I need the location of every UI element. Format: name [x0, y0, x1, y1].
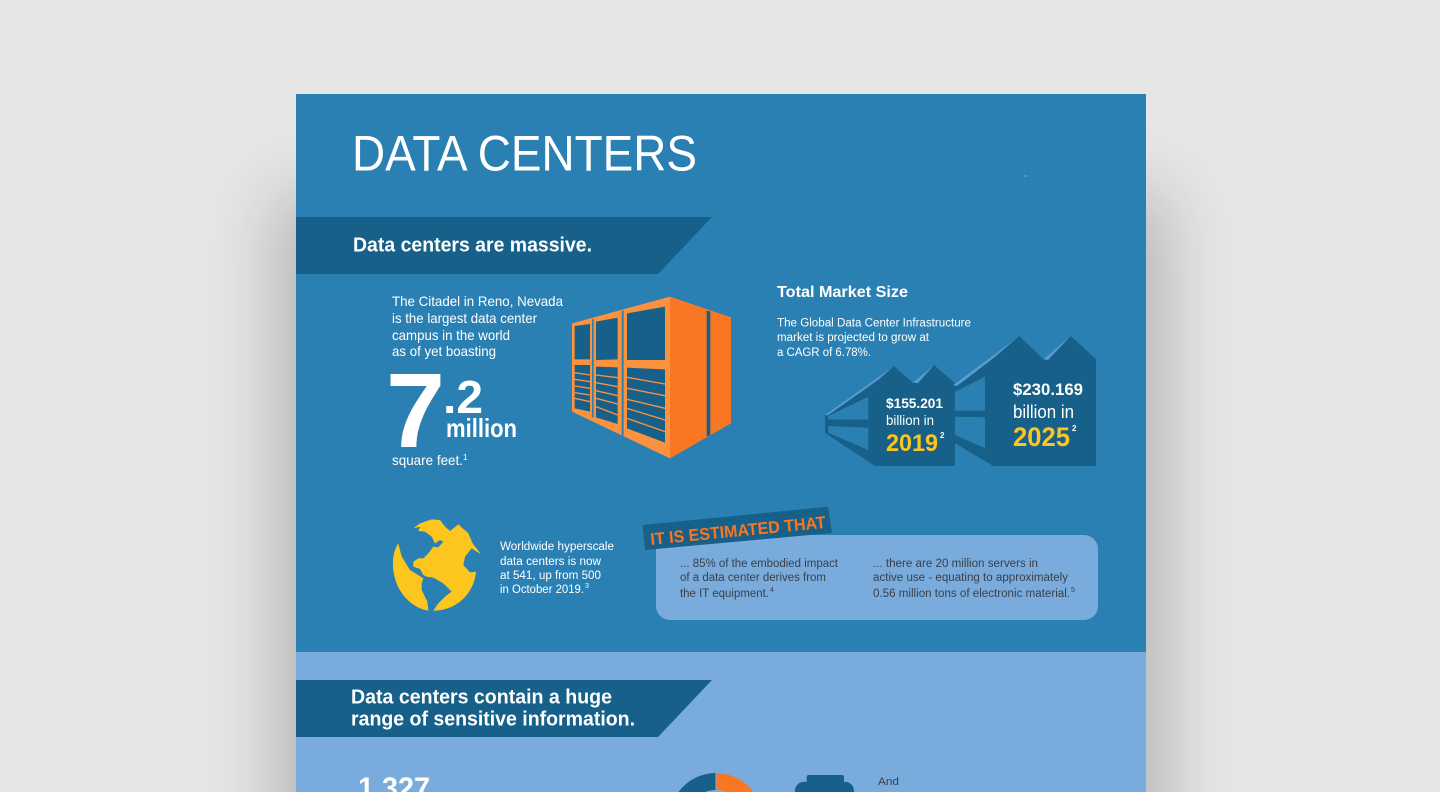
callout text: servers in use	[873, 558, 1075, 600]
text block: hyperscale count: in October 2019.	[500, 584, 584, 596]
value: 2019 market size: 2	[940, 431, 945, 440]
text block: The Citadel: is the largest data center	[392, 310, 537, 326]
callout text: embodied impact: the IT equipment.	[680, 588, 769, 600]
panel: sensitive information	[296, 652, 1146, 792]
big number: 7.2 million square feet: 7	[386, 352, 445, 470]
callout: it is estimated that	[643, 507, 1098, 620]
text: And: And	[878, 776, 899, 788]
text block: hyperscale count: at 541, up from 500	[500, 570, 601, 582]
callout text: servers in use: active use - equating to approximately	[873, 572, 1068, 584]
heading: total market size: Total Market Size	[777, 284, 908, 301]
value: 2025 market size: $230.169	[1013, 380, 1083, 399]
text block: hyperscale count: data centers is now	[500, 556, 602, 568]
callout text: servers in use: 0.56 million tons of electronic material.	[873, 588, 1070, 600]
icon: globe	[393, 519, 481, 611]
callout text: embodied impact	[680, 558, 839, 600]
icon: server racks	[572, 297, 731, 458]
poster drop shadow	[296, 94, 1146, 792]
text block: hyperscale count	[500, 541, 614, 596]
big number: 7.2 million square feet: million	[446, 413, 517, 443]
callout tag: IT IS ESTIMATED THAT	[650, 513, 827, 549]
callout text: servers in use: 5	[1071, 587, 1075, 594]
big number: 7.2 million square feet: square feet.	[392, 452, 463, 468]
text block: market growth: market is projected to grow at	[777, 332, 930, 344]
chart: donut	[678, 773, 754, 792]
text block: hyperscale count: 3	[585, 583, 589, 590]
value: 2019 market size: 2019	[886, 430, 938, 457]
value: 2025 market size: billion in	[1013, 402, 1074, 422]
value: 2019 market size: billion in	[886, 412, 934, 428]
text block: The Citadel: The Citadel in Reno, Nevada	[392, 293, 563, 309]
section banner: sensitive information	[296, 680, 712, 737]
callout text: embodied impact: of a data center derives from	[680, 572, 826, 584]
section banner: sensitive information: Data centers contain a huge	[351, 686, 612, 708]
big number: 7.2 million square feet	[386, 352, 517, 470]
callout text: embodied impact: ... 85% of the embodied impact	[680, 558, 839, 570]
section banner: sensitive information: range of sensitive information.	[351, 708, 635, 730]
text block: The Citadel: campus in the world	[392, 327, 510, 343]
value: 2025 market size	[1013, 380, 1083, 452]
value: 2019 market size	[886, 395, 945, 457]
text block: The Citadel	[392, 293, 563, 359]
section banner: massive	[296, 217, 712, 274]
value: 2025 market size: 2	[1072, 424, 1077, 433]
text block: market growth: a CAGR of 6.78%.	[777, 347, 871, 359]
value: 2019 market size: $155.201	[886, 395, 943, 411]
big number: 7.2 million square feet: 1	[463, 453, 468, 462]
text block: market growth	[777, 318, 971, 359]
panel: data centers are massive	[296, 94, 1146, 652]
callout text: embodied impact: 4	[770, 587, 774, 594]
icon: storage container	[795, 775, 854, 792]
text block: hyperscale count: Worldwide hyperscale	[500, 541, 614, 553]
text block: The Citadel: as of yet boasting	[392, 343, 496, 359]
callout text: servers in use: ... there are 20 million servers in	[873, 558, 1038, 570]
value: 2025 market size: 2025	[1013, 422, 1070, 452]
section banner: massive: Data centers are massive.	[353, 234, 592, 256]
title: DATA CENTERS	[352, 126, 697, 182]
text block: market growth: The Global Data Center Infrastructure	[777, 318, 971, 330]
chart: market size buildings	[825, 336, 1096, 466]
big number: 7.2 million square feet: .2	[443, 371, 483, 423]
